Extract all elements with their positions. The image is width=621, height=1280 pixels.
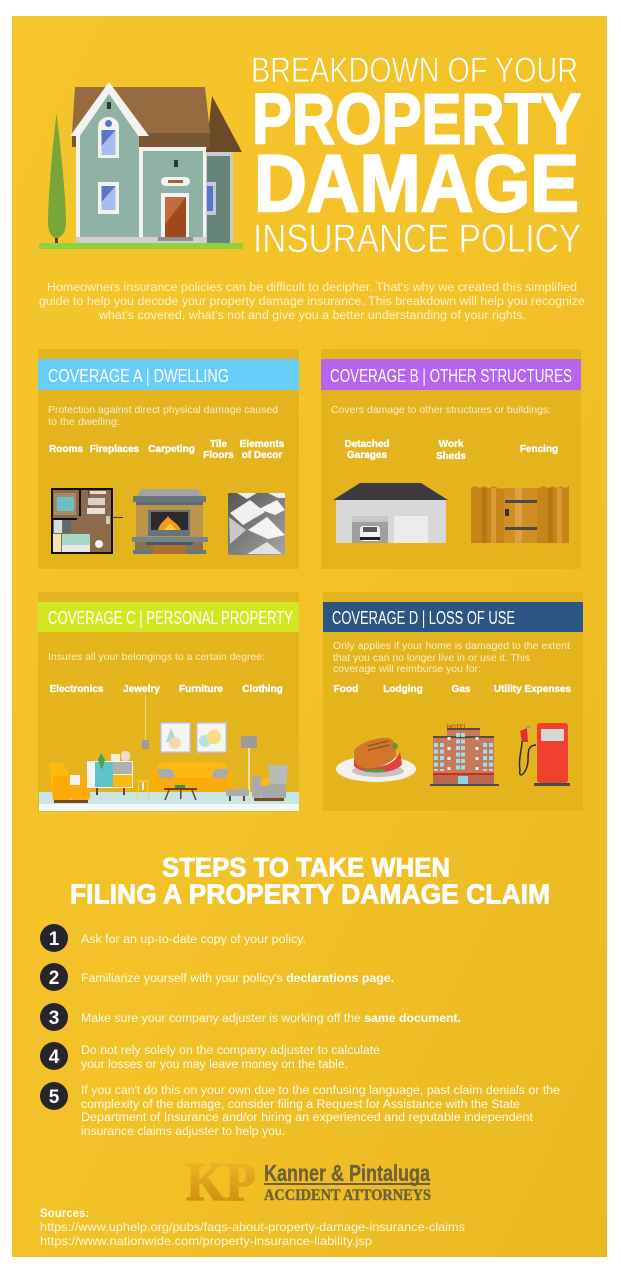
heading: coverage C: COVERAGE C | PERSONAL PROPERTY bbox=[48, 608, 293, 628]
sideboard bbox=[87, 761, 133, 788]
heading: steps: STEPS TO TAKE WHEN bbox=[162, 852, 450, 882]
step 5 bbox=[40, 1082, 560, 1138]
icon: lower window bbox=[98, 182, 119, 214]
icon: upper window bbox=[98, 117, 119, 158]
labels B bbox=[344, 439, 558, 462]
intro text: what's covered, what's not and give you a better understanding of your rights. bbox=[98, 308, 526, 322]
labels A: Rooms bbox=[49, 444, 83, 455]
labels A bbox=[49, 439, 285, 461]
step 4: your losses or you may leave money on the table. bbox=[81, 1059, 348, 1071]
step 4 bbox=[40, 1042, 380, 1071]
description D: Only applies if your home is damaged to the extent bbox=[333, 640, 570, 652]
description A: Protection against direct physical damage caused bbox=[48, 404, 278, 416]
panel: coverage D bbox=[323, 592, 583, 811]
labels C: Electronics bbox=[50, 684, 104, 695]
intro text bbox=[39, 280, 585, 322]
labels D: Food bbox=[334, 684, 358, 695]
step 2 bbox=[40, 963, 394, 991]
icon: tile floor bbox=[228, 493, 285, 555]
labels D: Lodging bbox=[383, 684, 423, 695]
labels A: Fireplaces bbox=[90, 444, 140, 455]
title bbox=[251, 51, 581, 261]
heading: coverage A: COVERAGE A | DWELLING bbox=[48, 366, 229, 386]
step 3 bbox=[40, 1003, 461, 1031]
labels B: Fencing bbox=[520, 444, 558, 455]
step 1: 1 bbox=[49, 929, 60, 950]
step 4: Do not rely solely on the company adjuster to calculate bbox=[81, 1045, 380, 1057]
logo: Kanner & Pintaluga: ACCIDENT ATTORNEYS bbox=[264, 1187, 431, 1204]
icon: floor plan bbox=[51, 488, 123, 554]
labels B: Garages bbox=[347, 450, 387, 461]
icon: gas pump bbox=[519, 723, 570, 786]
step 1: Ask for an up-to-date copy of your policy. bbox=[81, 934, 306, 946]
ottoman and gray armchair bbox=[226, 789, 249, 796]
icon: hotel bbox=[430, 725, 499, 786]
step 5: complexity of the damage, consider filing a Request for Assistance with the State bbox=[81, 1099, 520, 1111]
step 5: If you can't do this on your own due to the confusing language, past claim denials or the bbox=[81, 1085, 560, 1097]
step 5: 5 bbox=[49, 1087, 60, 1108]
description D: coverage will reimburse you for: bbox=[333, 663, 481, 675]
labels C: Clothing bbox=[242, 684, 283, 695]
sources: Sources: bbox=[40, 1208, 89, 1220]
heading: coverage D: COVERAGE D | LOSS OF USE bbox=[332, 608, 515, 628]
logo: Kanner & Pintaluga bbox=[186, 1151, 431, 1212]
logo: Kanner & Pintaluga: KP bbox=[186, 1151, 256, 1212]
description C: Insures all your belongings to a certain degree: bbox=[48, 651, 265, 663]
sources bbox=[40, 1208, 465, 1248]
sofa bbox=[157, 762, 227, 790]
description D: that you can no longer live in or use it. This bbox=[333, 652, 530, 664]
panel: coverage C bbox=[38, 592, 299, 812]
title: DAMAGE bbox=[254, 139, 579, 229]
heading: steps bbox=[70, 852, 550, 910]
heading: steps: FILING A PROPERTY DAMAGE CLAIM bbox=[70, 878, 550, 910]
labels D bbox=[334, 684, 572, 695]
labels A: Tile bbox=[210, 439, 227, 450]
step 5: Department of Insurance and/or hiring an experienced and reputable independent bbox=[81, 1112, 534, 1124]
labels A: of Decor bbox=[242, 450, 282, 461]
step 5: insurance claims adjuster to help you. bbox=[81, 1126, 285, 1138]
step 2: 2 bbox=[49, 968, 59, 989]
panel: coverage B bbox=[321, 349, 581, 569]
labels C: Furniture bbox=[179, 684, 223, 695]
icon: door bbox=[161, 193, 189, 237]
labels D: Gas bbox=[452, 684, 471, 695]
icon: sandwich plate bbox=[336, 738, 416, 782]
labels A: Floors bbox=[203, 450, 234, 461]
coffee table bbox=[164, 788, 197, 790]
labels D: Utility Expenses bbox=[494, 684, 572, 695]
icon: fireplace bbox=[132, 489, 208, 554]
sources: https://www.uphelp.org/pubs/faqs-about-property-damage-insurance-claims bbox=[40, 1220, 465, 1234]
logo: Kanner & Pintaluga: Kanner & Pintaluga bbox=[264, 1160, 430, 1186]
icon: living room bbox=[39, 694, 299, 811]
step 4: 4 bbox=[49, 1047, 60, 1068]
icon: wooden fence bbox=[471, 486, 569, 543]
description A: to the dwelling: bbox=[48, 416, 120, 428]
intro text: guide to help you decode your property damage insurance. This breakdown will help you recognize bbox=[39, 294, 585, 308]
icon: house illustration bbox=[39, 82, 243, 249]
labels B: Work bbox=[439, 439, 464, 450]
step 3: 3 bbox=[49, 1008, 59, 1029]
icon: garage bbox=[333, 483, 448, 543]
sources: https://www.nationwide.com/property-insurance-liability.jsp bbox=[40, 1234, 372, 1248]
icon: hotel: HOTEL bbox=[447, 725, 467, 731]
step 1 bbox=[40, 924, 306, 952]
labels A: Elements bbox=[240, 439, 285, 450]
armchair yellow bbox=[49, 763, 70, 800]
intro text: Homeowners insurance policies can be difficult to decipher. That's why we created this simplified bbox=[47, 280, 577, 294]
description B: Covers damage to other structures or buildings: bbox=[331, 404, 551, 416]
labels B: Detached bbox=[344, 439, 390, 450]
labels C bbox=[50, 684, 283, 695]
labels A: Carpeting bbox=[148, 444, 195, 455]
step 3: Make sure your company adjuster is working off the same document. bbox=[81, 1013, 461, 1025]
description A bbox=[48, 404, 278, 428]
labels B: Sheds bbox=[436, 451, 466, 462]
step 2: Familiarize yourself with your policy's declarations page. bbox=[81, 973, 394, 985]
panel: coverage A bbox=[38, 349, 299, 569]
icon: cypress tree bbox=[48, 113, 66, 243]
labels C: Jewelry bbox=[123, 684, 160, 695]
description D bbox=[333, 640, 570, 675]
